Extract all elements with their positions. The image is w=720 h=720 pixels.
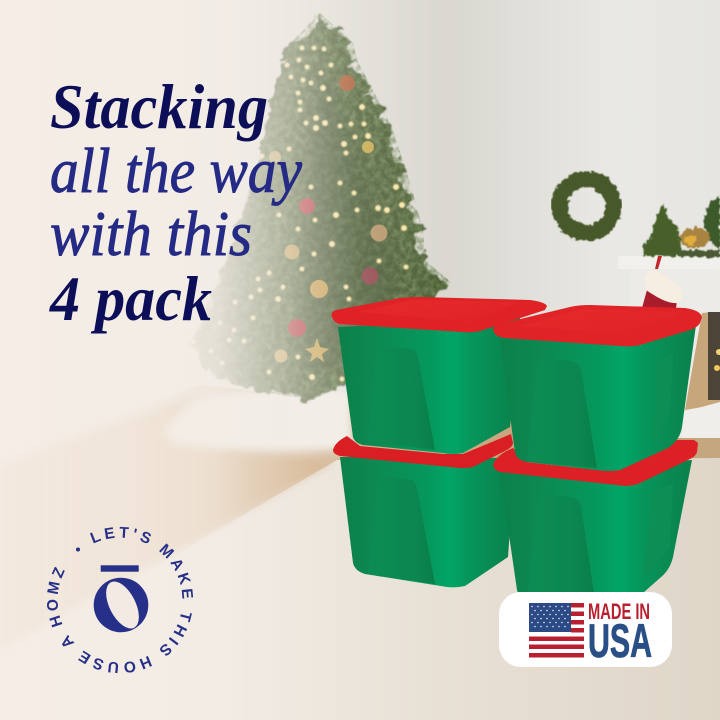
wood floor warm tint xyxy=(0,395,335,650)
christmas tree skirt xyxy=(163,388,352,451)
tote: top left xyxy=(332,297,547,454)
tote: bottom right xyxy=(493,437,698,600)
ornaments xyxy=(269,75,388,362)
tree lights xyxy=(190,46,408,386)
circular brand logo xyxy=(46,526,194,674)
badge text made in: MADE IN xyxy=(588,599,650,624)
wall wreath xyxy=(560,179,614,233)
american flag icon xyxy=(529,603,584,658)
tote: bottom left xyxy=(333,434,515,587)
heading: Stacking all the way with this 4 pack xyxy=(49,72,302,334)
heading line 1: Stacking xyxy=(50,72,268,142)
logo dot xyxy=(76,548,80,552)
tote: top right xyxy=(493,305,702,471)
mantel greenery xyxy=(642,196,720,257)
logo ring slogan: LET'S MAKE THIS HOUSE A HOMZ xyxy=(46,526,194,674)
heading line 3: with this xyxy=(50,199,252,269)
badge text usa: USA xyxy=(588,614,652,667)
fireplace mantel with stocking xyxy=(618,256,720,458)
logo letter o xyxy=(94,576,148,634)
heading line 2: all the way xyxy=(50,136,302,206)
badge: made in USA xyxy=(499,592,672,667)
christmas tree xyxy=(190,13,452,400)
heading line 4: 4 pack xyxy=(49,264,212,334)
logo bar xyxy=(101,565,139,572)
